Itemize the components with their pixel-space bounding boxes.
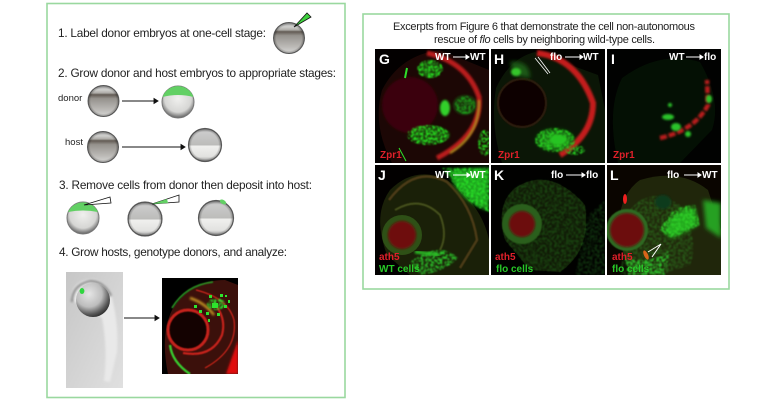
panel labels: flo: [550, 52, 562, 63]
panel labels: J: [378, 167, 386, 183]
panel labels: G: [379, 51, 390, 67]
panel labels: WT: [583, 52, 599, 63]
panel labels: flo cells: [496, 264, 534, 275]
micrograph K: [491, 165, 605, 275]
panel labels: WT cells: [379, 264, 420, 275]
icon: host with graft: [198, 199, 234, 236]
step 1 text: 1. Label donor embryos at one-cell stage:: [58, 26, 266, 40]
micrograph J: [375, 165, 489, 275]
icon: labelled embryo with needle: [274, 13, 311, 54]
panel labels: L: [610, 167, 619, 183]
panel labels: Zpr1: [380, 150, 402, 161]
panel labels: ath5: [379, 252, 400, 263]
icon: host embryo late: [188, 128, 222, 162]
icon: donor embryo early: [88, 86, 119, 116]
panel labels: flo: [704, 52, 716, 63]
panel labels: WT: [470, 52, 486, 63]
micrograph I: [607, 49, 721, 163]
micrograph H: [491, 49, 605, 163]
icon: donor embryo green: [162, 86, 194, 118]
panel labels: Zpr1: [498, 150, 520, 161]
panel labels: H: [494, 51, 504, 67]
step 3 text: 3. Remove cells from donor then deposit into host:: [59, 178, 312, 192]
panel labels: WT: [669, 52, 685, 63]
panel labels: ath5: [495, 252, 516, 263]
panel labels: flo: [667, 170, 679, 181]
panel labels: [378, 51, 718, 275]
micrograph G: [375, 49, 492, 163]
icon: host embryo early: [88, 132, 118, 162]
panel labels: flo: [586, 170, 598, 181]
panel labels: flo: [551, 170, 563, 181]
panel labels: WT: [702, 170, 718, 181]
step 2 text: 2. Grow donor and host embryos to appropriate stages:: [58, 66, 336, 80]
label: donor: donor: [58, 93, 82, 104]
heading: Excerpts from Figure 6 that demonstrate the cell non-autonomous: [393, 21, 696, 33]
icon: donor with pipette: [67, 197, 111, 234]
panel labels: WT: [470, 170, 486, 181]
heading: [393, 21, 696, 46]
arrow: analyze: [124, 316, 159, 320]
label: host: host: [65, 137, 83, 148]
panel labels: ath5: [612, 252, 633, 263]
arrow: donor: [122, 98, 158, 104]
panel labels: WT: [435, 170, 451, 181]
heading: rescue of flo cells by neighboring wild-type cells.: [434, 34, 655, 46]
arrow: host: [122, 144, 185, 150]
panel labels: flo cells: [612, 264, 650, 275]
icon: host with pipette: [128, 195, 179, 236]
panel: figure 6 excerpts: [363, 14, 729, 289]
panel: transplant protocol: [47, 4, 345, 398]
panel labels: K: [494, 167, 504, 183]
panel labels: WT: [435, 52, 451, 63]
step 4 text: 4. Grow hosts, genotype donors, and analyze:: [59, 245, 287, 259]
micrograph L: [606, 165, 721, 275]
image: confocal eye section: [162, 278, 238, 374]
panel labels: Zpr1: [613, 150, 635, 161]
image: larva: [66, 272, 123, 388]
panel labels: I: [611, 51, 615, 67]
